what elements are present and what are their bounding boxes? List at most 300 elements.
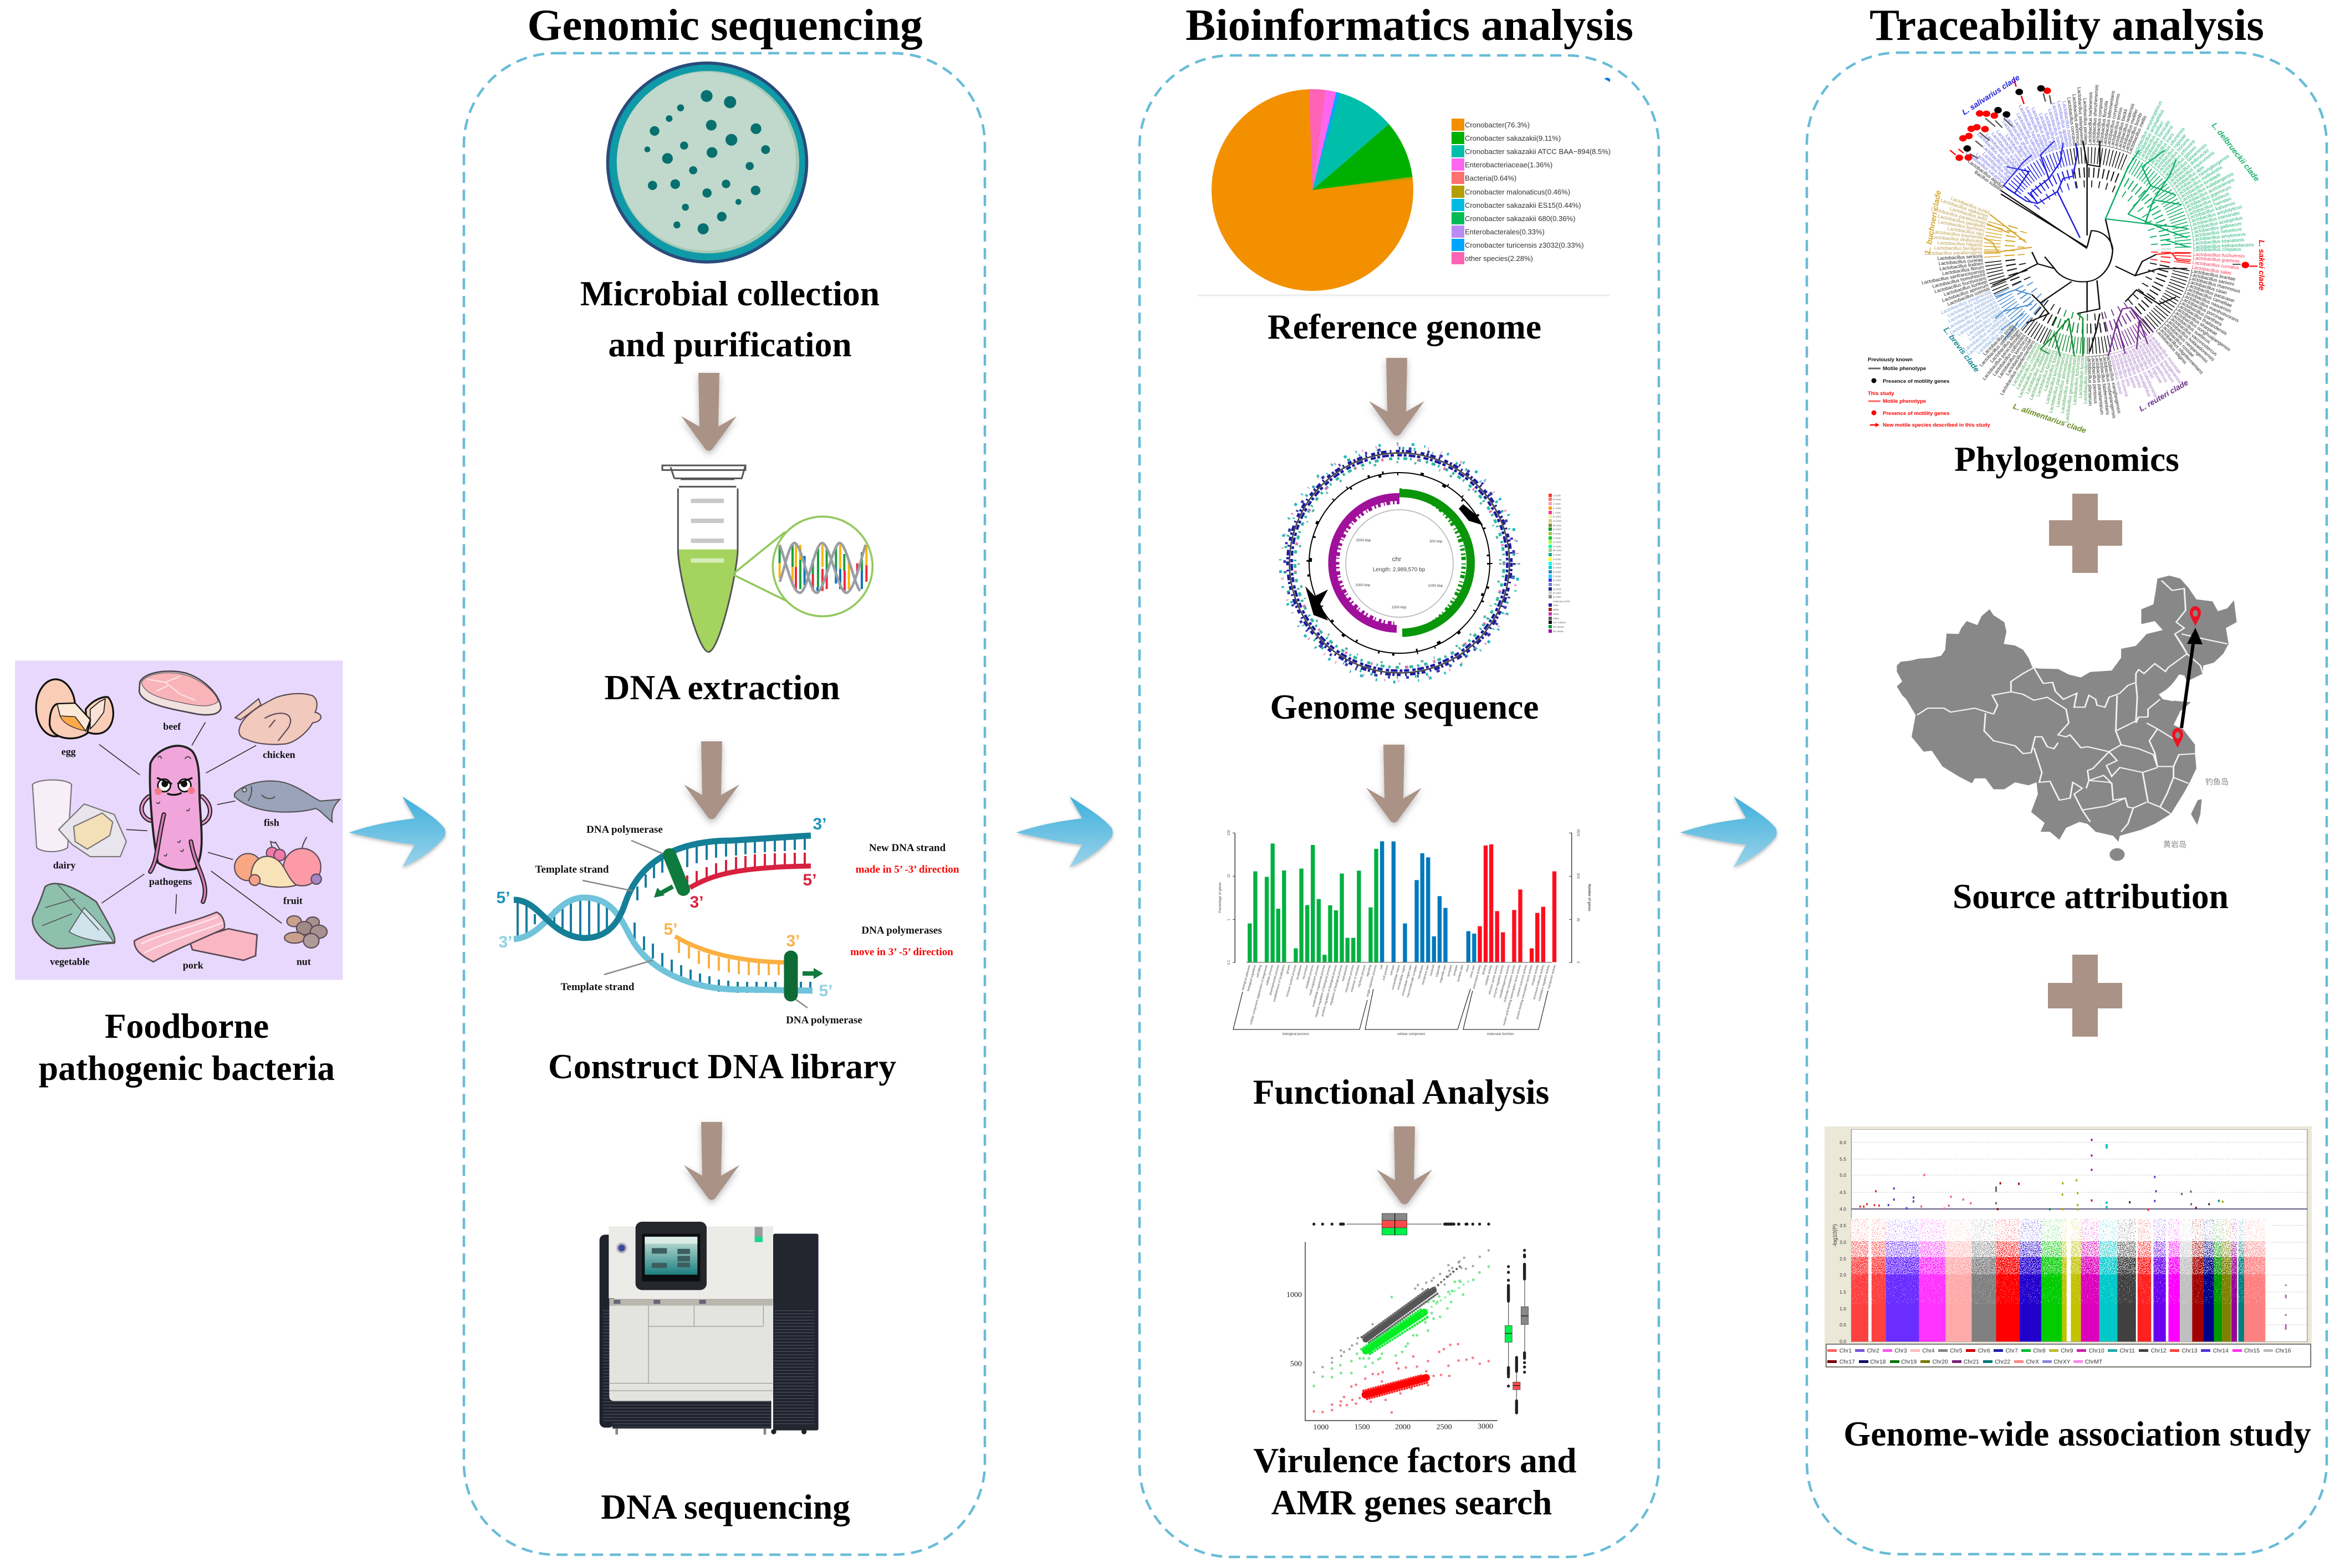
species labels: Lactobacillus hominis: [2156, 137, 2191, 174]
chart: GO functional bars: transporter activity: [1547, 965, 1557, 990]
genome legend: G COG: [1553, 566, 1562, 569]
species labels: Lactobacillus kefiranofaciens: [2193, 242, 2254, 249]
food labels: [50, 721, 311, 971]
species labels: Lactobacillus hayakitensis: [2017, 104, 2046, 156]
arrow: [681, 373, 737, 451]
species labels: Lactobacillus graminis: [2193, 255, 2240, 264]
species labels: Lactobacillus animalis: [2051, 102, 2067, 148]
species labels: Lactobacillus dextrinicus: [2071, 94, 2081, 146]
species labels: Lactobacillus formosensis: [2028, 348, 2053, 401]
species labels: Lactobacillus acidifarinae: [1963, 315, 2008, 352]
clade names: L. reuteri clade: [2137, 378, 2190, 413]
species labels: Lactobacillus panis: [2119, 349, 2138, 389]
Manhattan legend: Chr14: [2213, 1348, 2229, 1354]
species labels: Lactobacillus parabrevis: [1947, 296, 1995, 324]
chart: GO functional bars: synapse part: [1457, 965, 1464, 982]
dashed frame: [464, 53, 985, 1555]
Manhattan legend: Chr16: [2275, 1348, 2291, 1354]
chart: GO functional bars: nutrient reservoir activity: [1516, 965, 1528, 997]
species labels: Lactobacillus nasuensis: [2184, 289, 2232, 314]
species labels: Lactobacillus fuchuensis: [2193, 252, 2245, 259]
chart: GO functional bars: enzyme regulator activity: [1493, 965, 1505, 998]
species labels: Lactobacillus vaccinostercus: [2168, 315, 2218, 357]
chart: circular genome map: 1500 kbp: [1392, 606, 1407, 609]
chart: GO functional bars: membrane part: [1421, 965, 1430, 986]
genome legend: Unknown COG: [1553, 600, 1570, 603]
tree legend: This study: [1868, 391, 1894, 397]
species labels: Lactobacillus jensenii: [2144, 124, 2174, 165]
species labels: Lactobacillus parabuchneri: [1930, 206, 1987, 226]
species labels: Lactobacillus paralimentarius: [2047, 352, 2067, 413]
chart: GO functional bars: binding: [1482, 965, 1488, 975]
species labels: Lactobacillus coleohominis: [2130, 345, 2159, 398]
legend: Cronobacter malonaticus(0.46%): [1465, 188, 1570, 196]
chart: GO functional bars: metabolic process: [1305, 965, 1315, 989]
species labels: Lactobacillus mali: [1981, 151, 2013, 181]
chart: GO functional bars: biological process: [1283, 1033, 1309, 1036]
food labels: dairy: [53, 860, 76, 871]
chart: GO functional bars: 1: [1228, 919, 1231, 921]
icon: egg: [36, 679, 113, 739]
chart: circular genome map: Length: 2,989,570 bp: [1373, 567, 1426, 573]
diagram: DNA replication fork: 3’: [498, 933, 513, 951]
chart: GO functional bars: multicellular organismal process: [1312, 965, 1326, 1007]
dashed frame: [1140, 55, 1659, 1557]
genome legend: [1549, 494, 1570, 633]
clade names: L. salivarius clade: [1960, 73, 2021, 117]
chart: circular genome map: 2000 kbp: [1356, 583, 1371, 587]
species labels: Lactobacillus pontis: [2123, 348, 2143, 388]
species labels: Lactobacillus acidophilus: [2190, 215, 2243, 231]
Manhattan legend: Chr12: [2151, 1348, 2167, 1354]
genome legend: T COG: [1553, 537, 1561, 540]
genome legend: K COG: [1553, 507, 1561, 510]
species labels: Lactobacillus florum: [1942, 264, 1984, 276]
chart: GO functional bars: biological regulation: [1247, 965, 1257, 991]
Manhattan legend: [1826, 1344, 2311, 1367]
species labels: Lactobacillus plantarum: [2087, 356, 2093, 406]
species labels: Lactobacillus pobuzihii: [2030, 107, 2053, 153]
species labels: Lactobacillus casei: [2188, 279, 2227, 295]
tree branches: [1984, 141, 2190, 356]
species labels: Lactobacillus curvatus: [2192, 260, 2239, 270]
clade names: [1923, 73, 2266, 435]
genome legend: U COG: [1553, 541, 1561, 544]
chart: GO functional bars: cell: [1380, 965, 1384, 970]
chart: GO functional bars: extracellular matrix: [1391, 965, 1401, 990]
species labels: Lactobacillus aquaticus: [2001, 119, 2033, 163]
species labels: Lactobacillus frumenti: [2112, 351, 2130, 397]
species labels: Lactobacillus apinorum: [1942, 282, 1989, 303]
chart: GO functional bars: macromolecular complex: [1406, 965, 1418, 998]
species labels: Lactobacillus lindneri: [1939, 260, 1984, 271]
species labels: Lactobacillus mellifer: [2119, 108, 2139, 152]
Manhattan legend: Chr2: [1867, 1348, 1879, 1354]
chart: GO functional bars: catalytic activity: [1484, 965, 1493, 986]
species labels: Lactobacillus mindensis: [2025, 346, 2049, 394]
axis labels: 2.0: [1840, 1272, 1846, 1278]
chart: GO functional bars: cell killing: [1256, 965, 1263, 978]
species labels: Lactobacillus fabifermentans: [2098, 355, 2111, 415]
title: Bioinformatics analysis: [1186, 0, 1633, 50]
genome legend: GC skew-: [1553, 630, 1564, 633]
species labels: Lactobacillus parafarraginis: [1924, 249, 1983, 256]
food labels: nut: [297, 956, 311, 967]
species labels: Lactobacillus uvarum: [1995, 129, 2027, 168]
species labels: Lactobacillus psittaci: [2138, 120, 2165, 161]
chart: GO functional bars: Percentage of genes: [1219, 882, 1222, 913]
genome legend: E COG: [1553, 571, 1561, 573]
diagram: DNA replication fork: 3’: [689, 893, 704, 911]
clade names: L. alimentarius clade: [2012, 402, 2087, 435]
species labels: Lactobacillus sanfranciscensis: [1921, 268, 1985, 285]
species labels: Lactobacillus crispatus: [2193, 247, 2241, 252]
icon: vegetable: [33, 884, 115, 949]
chart: GO functional bars: cellular component organization of biogenesis: [1249, 965, 1269, 1025]
species labels: Lactobacillus parakefiri: [1938, 213, 1986, 229]
species labels: Lactobacillus kunkeei: [1943, 279, 1988, 297]
species labels: Lactobacillus suebicus: [2170, 311, 2211, 345]
chart: GO functional bars: virion part: [1469, 965, 1476, 978]
chart: GO functional bars: electron carrier activity: [1488, 965, 1499, 995]
axis labels: 3.5: [1840, 1223, 1846, 1228]
species labels: Lactobacillus helveticus: [2191, 226, 2242, 239]
panel: genomic sequencing: [464, 0, 985, 1555]
species labels: Bacillus subtilis: [1974, 169, 2003, 192]
chart: GO functional bars: extracellular region: [1397, 965, 1407, 990]
species labels: Lactobacillus delbrueckii: [2167, 147, 2210, 185]
source and target pins: [2172, 606, 2203, 748]
species labels: Lactobacillus malefermentans: [1999, 339, 2036, 396]
species labels: Lactobacillus kitasatonis: [2193, 237, 2244, 246]
chart: GO functional bars: signaling: [1366, 965, 1372, 977]
genome legend: Y COG: [1553, 554, 1561, 556]
chart: GO functional bars: molecular function: [1487, 1033, 1514, 1036]
food labels: beef: [163, 721, 181, 732]
chart: GO functional bars: 32: [1577, 918, 1581, 921]
species labels: Lactobacillus antri: [2133, 343, 2155, 380]
genome legend: A COG: [1553, 494, 1561, 497]
food labels: fish: [264, 817, 279, 828]
species labels: Lactobacillus thailandensis: [2176, 303, 2228, 336]
chart: GO functional bars: translation regulator activity: [1538, 965, 1551, 1001]
chart: GO functional bars: positive regulation of biological process: [1321, 965, 1338, 1017]
icon: beef: [139, 671, 221, 715]
species labels: Lactobacillus oris: [2116, 350, 2132, 387]
species labels: Lactobacillus sunkii: [1950, 196, 1990, 216]
icon: petri dish: [606, 62, 808, 264]
species labels: Lactobacillus kimchicus: [1996, 335, 2030, 379]
arrow: to traceability: [1680, 797, 1777, 867]
species labels: Lactobacillus kimchiensis: [2044, 351, 2063, 404]
species labels: Lactobacillus iners: [2148, 132, 2175, 167]
legend: Enterobacteriaceae(1.36%): [1465, 161, 1552, 169]
species labels: Lactobacillus fructivorans: [1934, 275, 1987, 294]
diagram: DNA replication fork: New DNA strand: [869, 842, 946, 854]
chart: GO functional bars: localization: [1296, 965, 1303, 980]
axis labels: -log10(P): [1832, 1224, 1838, 1247]
tree legend: Presence of motility genes: [1883, 411, 1949, 417]
species labels: Lactobacillus amylolyticus: [2188, 204, 2242, 224]
chart: GO functional bars: nucleic acid binding transcription factor activity: [1503, 965, 1522, 1026]
label: microbial collection: Microbial collection: [580, 274, 880, 313]
label: virulence factors and AMR genes search: AMR genes search: [1271, 1483, 1552, 1522]
chart: GO functional bars: [1219, 829, 1591, 1036]
Manhattan legend: Chr9: [2061, 1348, 2073, 1354]
axis labels: 2.5: [1840, 1256, 1846, 1262]
tree legend: Presence of motility genes: [1883, 378, 1949, 385]
axis labels: 1.0: [1840, 1306, 1846, 1311]
species labels: Lactobacillus pentosus: [2091, 355, 2098, 404]
Manhattan legend: Chr21: [1964, 1359, 1979, 1365]
species labels: Lactobacillus futsaii: [2042, 350, 2060, 391]
icon: fruit: [234, 837, 321, 887]
species labels: Lactobacillus brantae: [2191, 268, 2236, 282]
species labels: Lactobacillus versmoldensis: [2060, 354, 2074, 413]
species labels: Lactobacillus iwatensis: [2116, 103, 2135, 151]
Manhattan legend: ChrX: [2026, 1359, 2039, 1365]
label: construct DNA library: Construct DNA library: [548, 1047, 896, 1086]
genome legend: J COG: [1553, 503, 1561, 505]
species labels: Lactobacillus songhuajiangensis: [2173, 309, 2231, 352]
species labels: Lactobacillus fermentum: [2143, 337, 2175, 383]
species labels: [1921, 85, 2254, 423]
species labels: Lactobacillus koreensis: [1946, 293, 1994, 318]
species labels: Lactobacillus oryzae: [2005, 337, 2033, 376]
genome legend: C COG: [1553, 562, 1561, 565]
species labels: Lactobacillus capillatus: [1985, 132, 2021, 173]
species labels: Lactobacillus sakei: [2191, 264, 2232, 276]
food labels: pathogens: [149, 876, 192, 887]
chart: GO functional bars: reproductive process: [1345, 965, 1355, 993]
species labels: Lactobacillus acidipiscis: [2025, 106, 2049, 155]
species labels: Lactobacillus amylovorus: [2192, 231, 2246, 242]
species labels: Lactobacillus nodensis: [2082, 356, 2089, 404]
species labels: Lactobacillus melliventris: [2175, 165, 2223, 197]
chart: GO functional bars: 315: [1577, 873, 1581, 879]
species labels: Lactobacillus brevis: [1966, 309, 2003, 337]
heading: foodborne pathogenic bacteria: pathogenic bacteria: [39, 1048, 335, 1088]
species labels: Lactobacillus otakiensis: [1940, 197, 1989, 219]
species labels: Lactobacillus equi: [2043, 112, 2060, 151]
chart: Manhattan plot: [1825, 1126, 2312, 1368]
chart: GO functional bars: Number of genes: [1587, 884, 1591, 911]
genome legend: Q COG: [1553, 588, 1562, 591]
species labels: Lactobacillus kalixensis: [2187, 200, 2236, 221]
dashed frame: [1807, 53, 2327, 1554]
chart: scatter with marginal boxplots: 1000: [1286, 1291, 1302, 1299]
legend: Cronobacter sakazakii ATCC BAA−894(8.5%): [1465, 147, 1611, 156]
food illustration box: [15, 660, 343, 980]
tree legend: New motile species described in this study: [1883, 422, 1990, 428]
chart: GO functional bars: cell junction: [1382, 965, 1389, 981]
icon: DNA tube with magnifier: [662, 465, 872, 652]
species labels: Lactobacillus paucivorans: [1946, 299, 1997, 330]
Manhattan legend: Chr5: [1950, 1348, 1963, 1354]
arrow: [1369, 358, 1424, 435]
heading: foodborne pathogenic bacteria: Foodborne: [105, 1006, 269, 1046]
genome legend: GC content: [1553, 621, 1566, 624]
species labels: Lactobacillus farciminis: [2035, 349, 2056, 397]
panel: traceability analysis: [1807, 0, 2327, 1554]
species labels: Lactobacillus spicheri: [1976, 320, 2013, 355]
chart: circular genome map: 500 kbp: [1429, 540, 1443, 544]
diagram: DNA replication fork: Template strand: [535, 864, 609, 875]
species labels: Lactobacillus bombi: [2123, 112, 2143, 153]
species labels: Lactobacillus harbinensis: [2087, 92, 2093, 145]
species labels: Lactobacillus silagei: [1989, 328, 2021, 363]
species labels: Lactobacillus sucicola: [1990, 131, 2024, 171]
label: functional analysis: Functional Analysis: [1253, 1072, 1549, 1111]
species labels: Lactobacillus vini: [2005, 133, 2030, 166]
chart: scatter with marginal boxplots: 500: [1290, 1360, 1302, 1369]
label: DNA sequencing: DNA sequencing: [601, 1487, 850, 1526]
chart: GO functional bars: establishment of localization: [1273, 965, 1286, 1002]
diagram: DNA replication fork: 3’: [813, 815, 827, 833]
icon: fish: [234, 781, 340, 822]
species labels: Lactobacillus gallinarum: [2191, 221, 2242, 235]
species labels: Lactobacillus camelliae: [2185, 285, 2233, 309]
genome legend: R COG: [1553, 592, 1561, 595]
Manhattan legend: Chr8: [2033, 1348, 2046, 1354]
chart: GO functional bars: protein binding transcription factor activity: [1516, 965, 1534, 1019]
species labels: Lactobacillus agilis: [2038, 112, 2056, 152]
species labels: Lactobacillus apis: [2172, 164, 2205, 191]
species labels: Lactobacillus similis: [1982, 323, 2015, 356]
motility markers: [1950, 79, 2257, 268]
species labels: Lactobacillus acetotolerans: [2181, 177, 2235, 207]
Manhattan legend: Chr18: [1870, 1359, 1886, 1365]
axis labels: 4.0: [1840, 1206, 1846, 1212]
species labels: Lactobacillus paraplantarum: [2094, 355, 2105, 415]
axis labels: 0.5: [1840, 1322, 1846, 1328]
tree rakes and clade arcs: [1992, 155, 2183, 346]
panel: bioinformatics analysis: [1140, 0, 1659, 1557]
species labels: Lactobacillus secaliphilus: [2127, 346, 2153, 398]
species labels: Lactobacillus collinoides: [1991, 333, 2027, 377]
genome legend: F COG: [1553, 575, 1561, 578]
species labels: Lactobacillus gastricus: [2140, 339, 2169, 383]
genome legend: rRNA: [1553, 613, 1559, 616]
arrow: to genomic sequencing: [349, 797, 446, 867]
species labels: Lactobacillus farraginis: [1934, 245, 1983, 252]
legend: Enterobacterales(0.33%): [1465, 228, 1545, 236]
title: Genomic sequencing: [527, 0, 923, 50]
diagram: DNA replication fork: DNA polymerases: [861, 925, 942, 936]
chart: GO functional bars: 10: [1228, 874, 1231, 878]
species labels: Lactobacillus mudanjiangensis: [2102, 354, 2117, 419]
Manhattan legend: Chr13: [2181, 1348, 2198, 1354]
chart: GO functional bars: synapse: [1453, 965, 1459, 976]
chart: GO functional bars: cell part: [1389, 965, 1396, 976]
icon: pork: [134, 912, 257, 962]
species labels: Lactobacillus panthera: [2179, 299, 2223, 327]
axis labels: 0.0: [1840, 1339, 1846, 1344]
diagram: DNA replication fork: Template strand: [561, 981, 635, 993]
chart: GO functional bars: cellular process: [1265, 965, 1274, 986]
Manhattan legend: Chr3: [1894, 1348, 1907, 1354]
genome legend: D COG: [1553, 515, 1561, 518]
chart: scatter with marginal boxplots: 1500: [1355, 1423, 1370, 1431]
species labels: Lactobacillus pasteurii: [2184, 191, 2230, 213]
species labels: Lactobacillus xiangfangensis: [2105, 353, 2122, 414]
species labels: Lactobacillus sanivini: [2190, 271, 2235, 287]
label: genome-wide association study: Genome-wide association study: [1843, 1415, 2311, 1453]
species labels: Lactobacillus paracollinoides: [1981, 331, 2024, 381]
arrow: [684, 1122, 739, 1200]
chart: GO functional bars: 3: [1577, 961, 1581, 964]
chart: GO functional bars: locomotion: [1302, 965, 1309, 980]
label: virulence factors and AMR genes search: Virulence factors and: [1253, 1441, 1577, 1480]
species labels: Lactobacillus satsumensis: [1976, 131, 2018, 175]
species labels: Lactobacillus reuteri: [2109, 352, 2124, 395]
Manhattan legend: Chr1: [1840, 1348, 1852, 1354]
diagram: DNA replication fork: made in 5’ -3’ direction: [856, 864, 959, 875]
species labels: Lactobacillus fornicalis: [2141, 119, 2171, 163]
species labels: Lactobacillus equicursoris: [2169, 150, 2215, 188]
species labels: Lactobacillus kimbladii: [2178, 172, 2221, 200]
tree legend: Motile phenotype: [1883, 398, 1926, 404]
species labels: Lactobacillus composti: [2094, 98, 2104, 146]
chart: scatter with marginal boxplots: 2000: [1395, 1423, 1411, 1431]
species labels: Lactobacillus rogosae: [2153, 132, 2188, 172]
genome legend: N COG: [1553, 528, 1561, 531]
diagram: DNA replication fork: 5’: [663, 920, 678, 939]
Manhattan legend: Chr22: [1995, 1359, 2010, 1365]
chart: GO functional bars: immune system process: [1286, 965, 1297, 997]
chart: GO functional bars: developmental process: [1269, 965, 1280, 996]
species labels: Lactobacillus nagelii: [1981, 144, 2015, 178]
chart: phylogenomic tree: [1868, 73, 2266, 435]
chart: GO functional bars: nucleoid: [1429, 965, 1435, 976]
species labels: Lactobacillus taiwanensis: [2164, 142, 2208, 182]
species labels: Lactobacillus mellis: [2127, 115, 2148, 155]
diagram: DNA replication fork: 5’: [496, 889, 510, 907]
species labels: Lactobacillus gigeriorum: [2183, 184, 2232, 210]
genome legend: I COG: [1553, 583, 1560, 586]
species labels: Lactobacillus hilgardii: [1937, 240, 1983, 248]
diagram: DNA replication fork: 3’: [786, 932, 800, 950]
species labels: Lactobacillus amylotrophicus: [2132, 100, 2163, 157]
species labels: Lactobacillus buchneri: [1938, 219, 1985, 233]
genome legend: H COG: [1553, 579, 1561, 582]
Manhattan legend: Chr17: [1840, 1359, 1855, 1365]
tree legend: Motile phenotype: [1883, 366, 1926, 372]
genome legend: S COG: [1553, 596, 1561, 598]
legend: Cronobacter sakazakii ES15(0.44%): [1465, 201, 1581, 209]
chart: GO functional bars: virion: [1465, 965, 1470, 972]
species labels: Lactobacillus helsingborgensis: [2174, 153, 2230, 194]
diagram: DNA replication fork: move in 3’ -5’ direction: [850, 946, 953, 958]
species labels: Lactobacillus furfuricola: [2072, 355, 2081, 405]
chart: GO functional bars: receptor activity: [1531, 965, 1540, 986]
clade names: L. brevis clade: [1942, 325, 1981, 374]
pie chart: species composition: [1197, 78, 1611, 295]
tree legend: Previously known: [1868, 357, 1913, 363]
chart: scatter with marginal boxplots: [1286, 1213, 1529, 1432]
species labels: Lactobacillus yonginensis: [1940, 289, 1992, 315]
Manhattan legend: Chr19: [1901, 1359, 1917, 1365]
chart: circular genome map: chr: [1392, 555, 1401, 563]
legend: [1452, 119, 1611, 264]
species labels: Lactobacillus kefiri: [1949, 206, 1988, 222]
axis labels: 5.5: [1840, 1156, 1846, 1162]
chart: scatter with marginal boxplots: 2500: [1437, 1423, 1452, 1431]
island names: 黄岩岛: [2163, 840, 2186, 849]
chart: GO functional bars: molecular transducer activity: [1503, 965, 1516, 1003]
species labels: Lactobacillus bifermentans: [2102, 90, 2116, 147]
legend: Cronobacter(76.3%): [1465, 121, 1530, 129]
